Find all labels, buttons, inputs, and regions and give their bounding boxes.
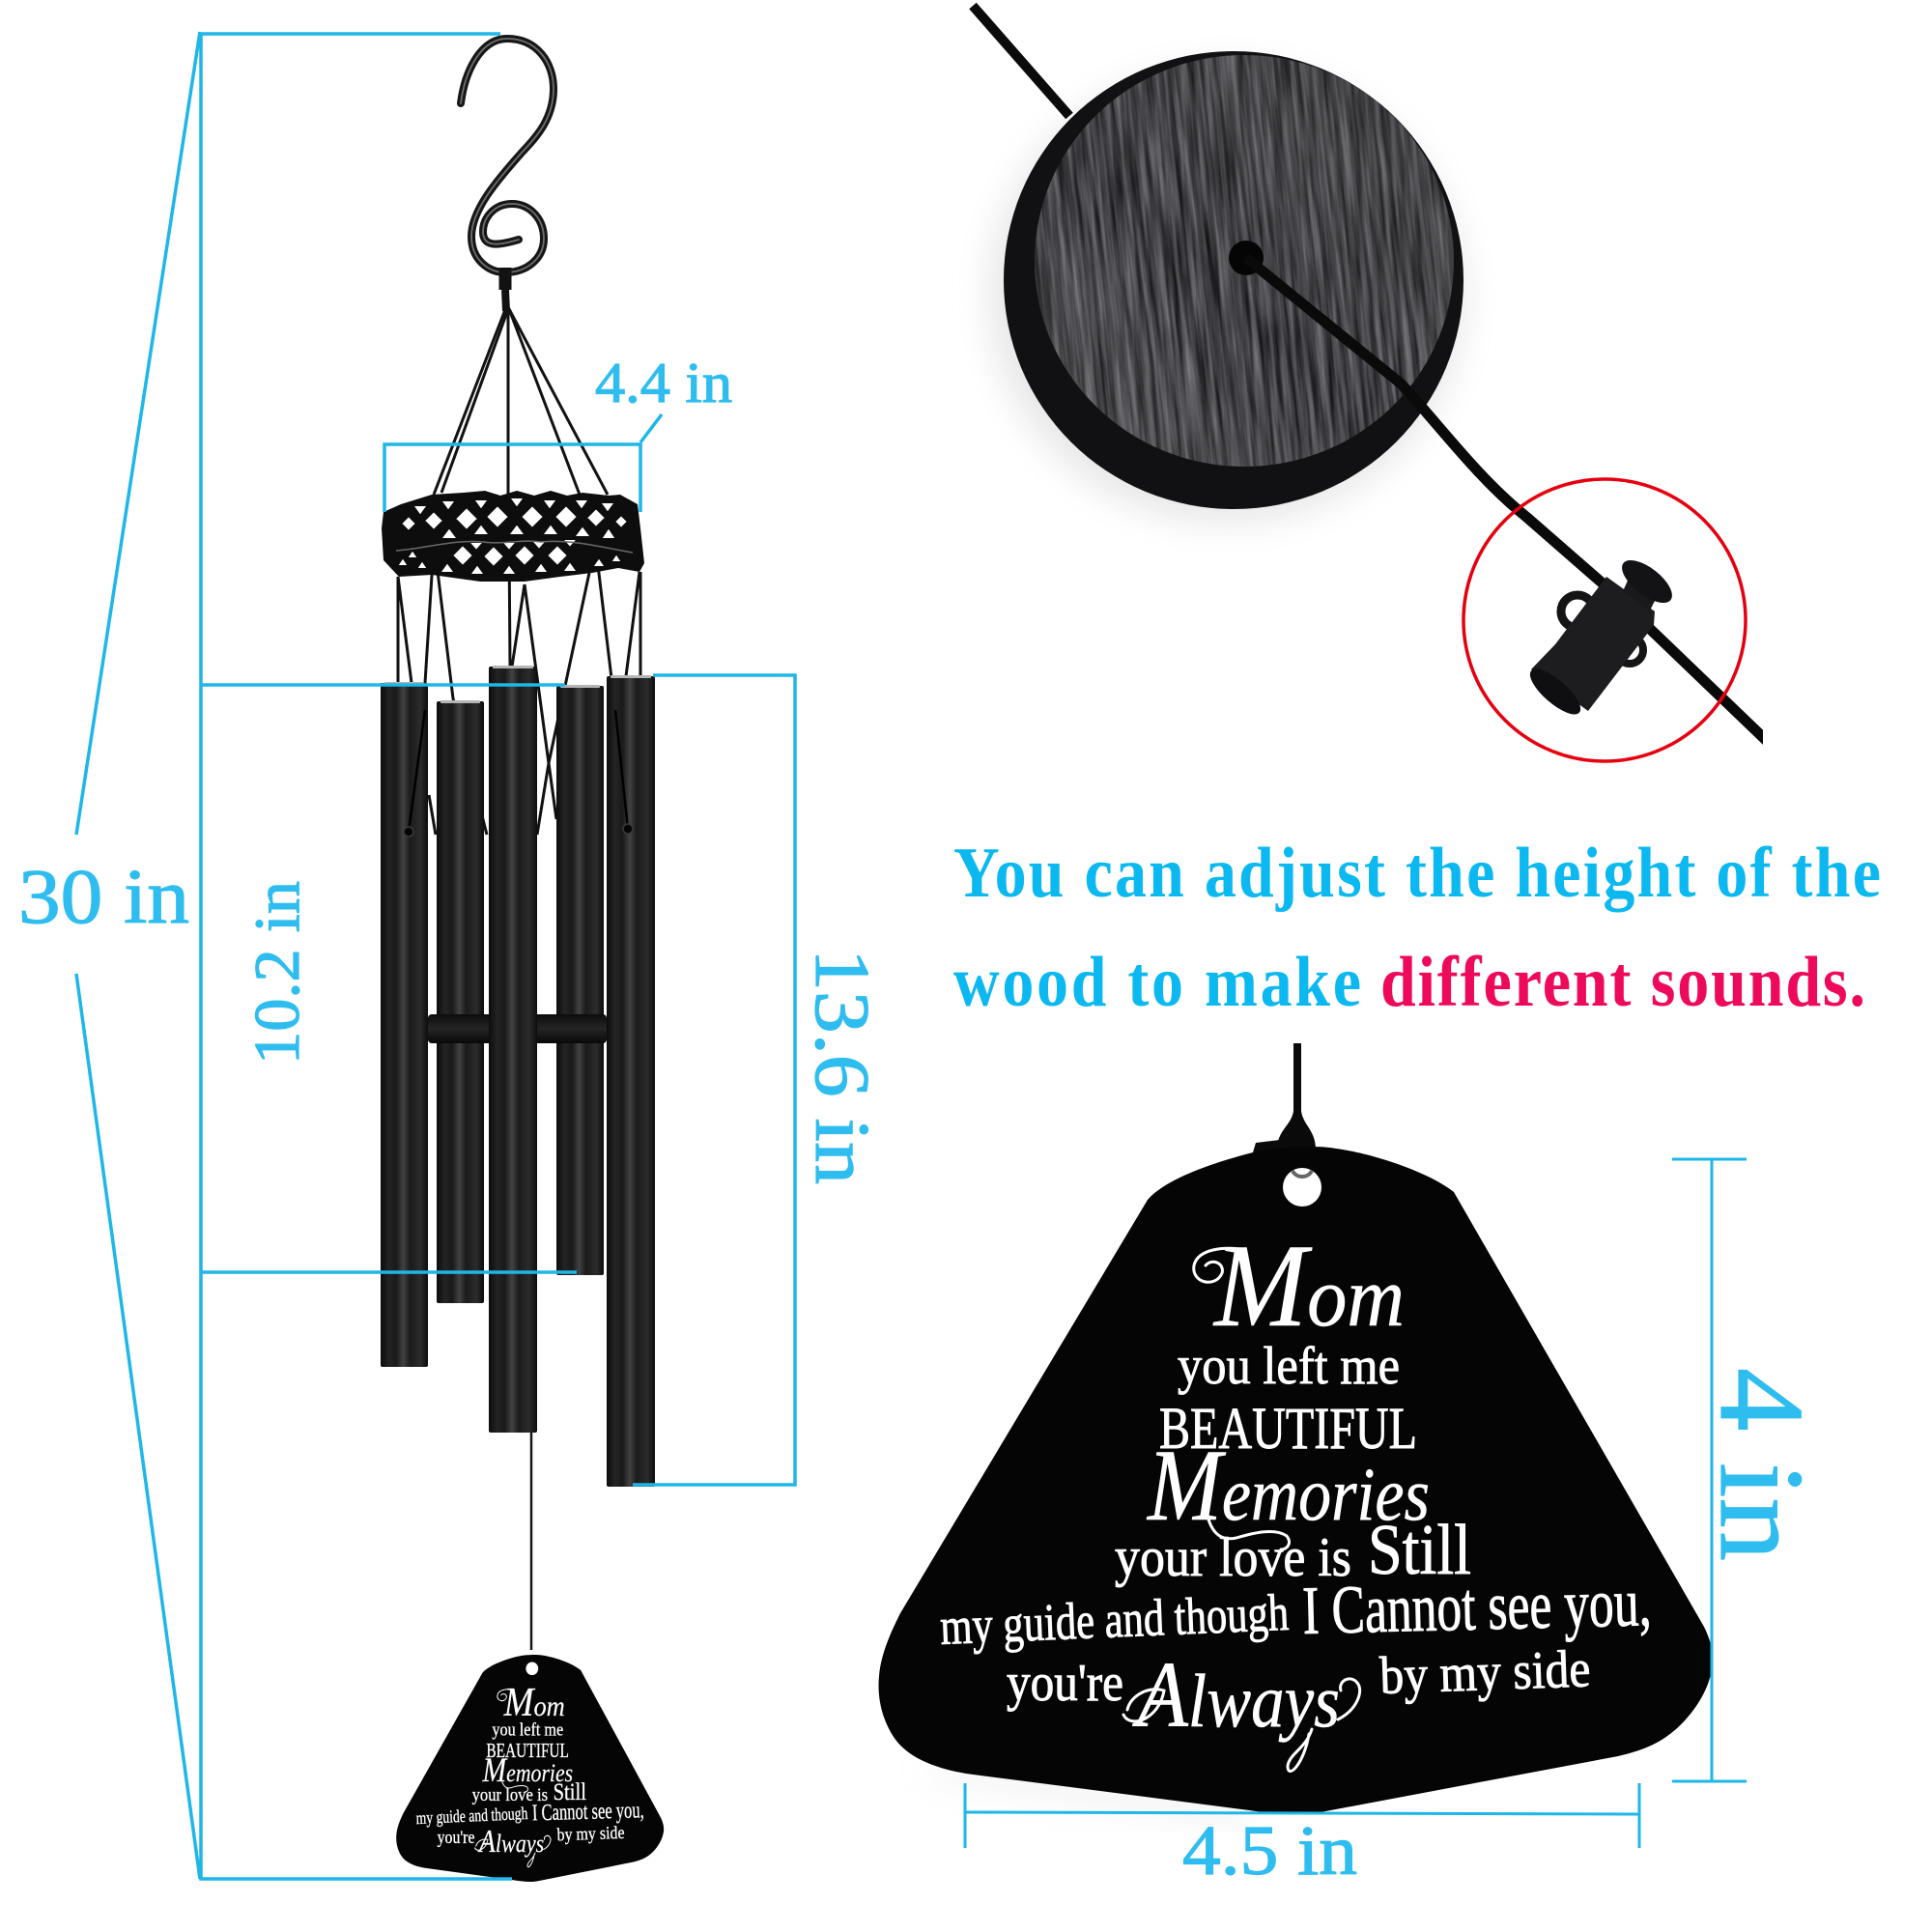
icon: S hook xyxy=(461,39,554,272)
red highlight circle xyxy=(1463,479,1746,761)
engraved message: Always xyxy=(1132,1643,1340,1747)
tube 2 xyxy=(437,700,484,1303)
centre striker bar xyxy=(428,1014,607,1043)
tube 3 xyxy=(489,666,537,1433)
label: 10.2 in: 10.2 in xyxy=(242,881,313,1065)
decorative lace ring xyxy=(382,491,644,582)
cord loop in hole xyxy=(1293,1171,1312,1177)
tube 1 xyxy=(381,682,428,1367)
engraved message: Mom xyxy=(1212,1219,1405,1351)
caption: different sounds. xyxy=(1380,944,1865,1022)
label: 4 in: 4 in xyxy=(1694,1368,1828,1561)
engraved message: I Cannot see you, xyxy=(1301,1565,1652,1649)
label: 4.4 in: 4.4 in xyxy=(595,351,732,414)
cord hole xyxy=(1229,241,1264,275)
bell shape xyxy=(879,1147,1713,1814)
bell hole xyxy=(1283,1168,1321,1207)
dimension: 4 in bell height xyxy=(1672,1159,1828,1781)
engraved message: by my side xyxy=(1378,1638,1591,1705)
small bell text: I Cannot see you, xyxy=(532,1798,644,1827)
caption xyxy=(953,835,1881,1022)
label: 30 in: 30 in xyxy=(18,853,189,940)
label: 13.6 in: 13.6 in xyxy=(799,949,884,1184)
small bell text: Memories xyxy=(482,1750,573,1789)
engraved message: you left me xyxy=(1178,1336,1400,1395)
label: 4.5 in: 4.5 in xyxy=(1182,1811,1357,1889)
wind chime illustration xyxy=(381,39,664,1882)
dimension: 10.2 in short tube xyxy=(201,685,577,1272)
engraved message: Memories xyxy=(1146,1429,1430,1542)
tube 5 xyxy=(607,675,655,1487)
caption: wood to make xyxy=(953,944,1361,1022)
strings from ring to tubes xyxy=(398,541,640,835)
cord and knot xyxy=(1253,1043,1316,1152)
small bell text: Always xyxy=(477,1824,544,1860)
photo: wooden striker disc with cord xyxy=(973,0,1768,761)
small bell sail with message xyxy=(396,1655,664,1882)
small bell text: your love is xyxy=(472,1784,548,1805)
small bell text: BEAUTIFUL xyxy=(486,1741,569,1762)
engraved message: Still xyxy=(1368,1511,1471,1590)
wood face xyxy=(1035,55,1454,467)
soft shadow xyxy=(990,68,1463,522)
small bell text: by my side xyxy=(556,1822,625,1845)
disc body xyxy=(1004,51,1463,509)
engraved message: BEAUTIFUL xyxy=(1159,1397,1417,1462)
tube 4 xyxy=(556,685,604,1275)
small bell text: you left me xyxy=(492,1719,563,1739)
soft shadow under bell xyxy=(927,1763,1246,1821)
small bell text: my guide and though xyxy=(415,1803,528,1828)
lower cord xyxy=(1246,258,1768,742)
hanging strings from hook to ring xyxy=(434,268,608,495)
sail string xyxy=(530,1433,532,1650)
small bell text xyxy=(415,1680,644,1867)
engraved message: my guide and though xyxy=(939,1583,1290,1656)
caption: You can adjust the height of the xyxy=(953,835,1881,913)
small bell text: you're xyxy=(438,1827,474,1847)
small bell text: Still xyxy=(554,1779,586,1805)
large bell sail xyxy=(879,1043,1713,1821)
icon: cord lock toggle xyxy=(1523,553,1679,722)
engraved message: your love is xyxy=(1115,1527,1351,1588)
upper cord xyxy=(973,6,1069,116)
engraved message xyxy=(939,1219,1652,1772)
dimension: 30 in overall height xyxy=(18,32,512,1879)
dimension: 13.6 in long tube xyxy=(633,675,884,1485)
engraved message: you're xyxy=(1007,1653,1123,1712)
small bell hole xyxy=(526,1662,538,1675)
dimension: 4.4 in ring diameter xyxy=(384,351,732,512)
dimension: 4.5 in bell width xyxy=(965,1783,1639,1889)
small bell shape xyxy=(396,1655,664,1882)
small bell text: Mom xyxy=(503,1680,565,1724)
